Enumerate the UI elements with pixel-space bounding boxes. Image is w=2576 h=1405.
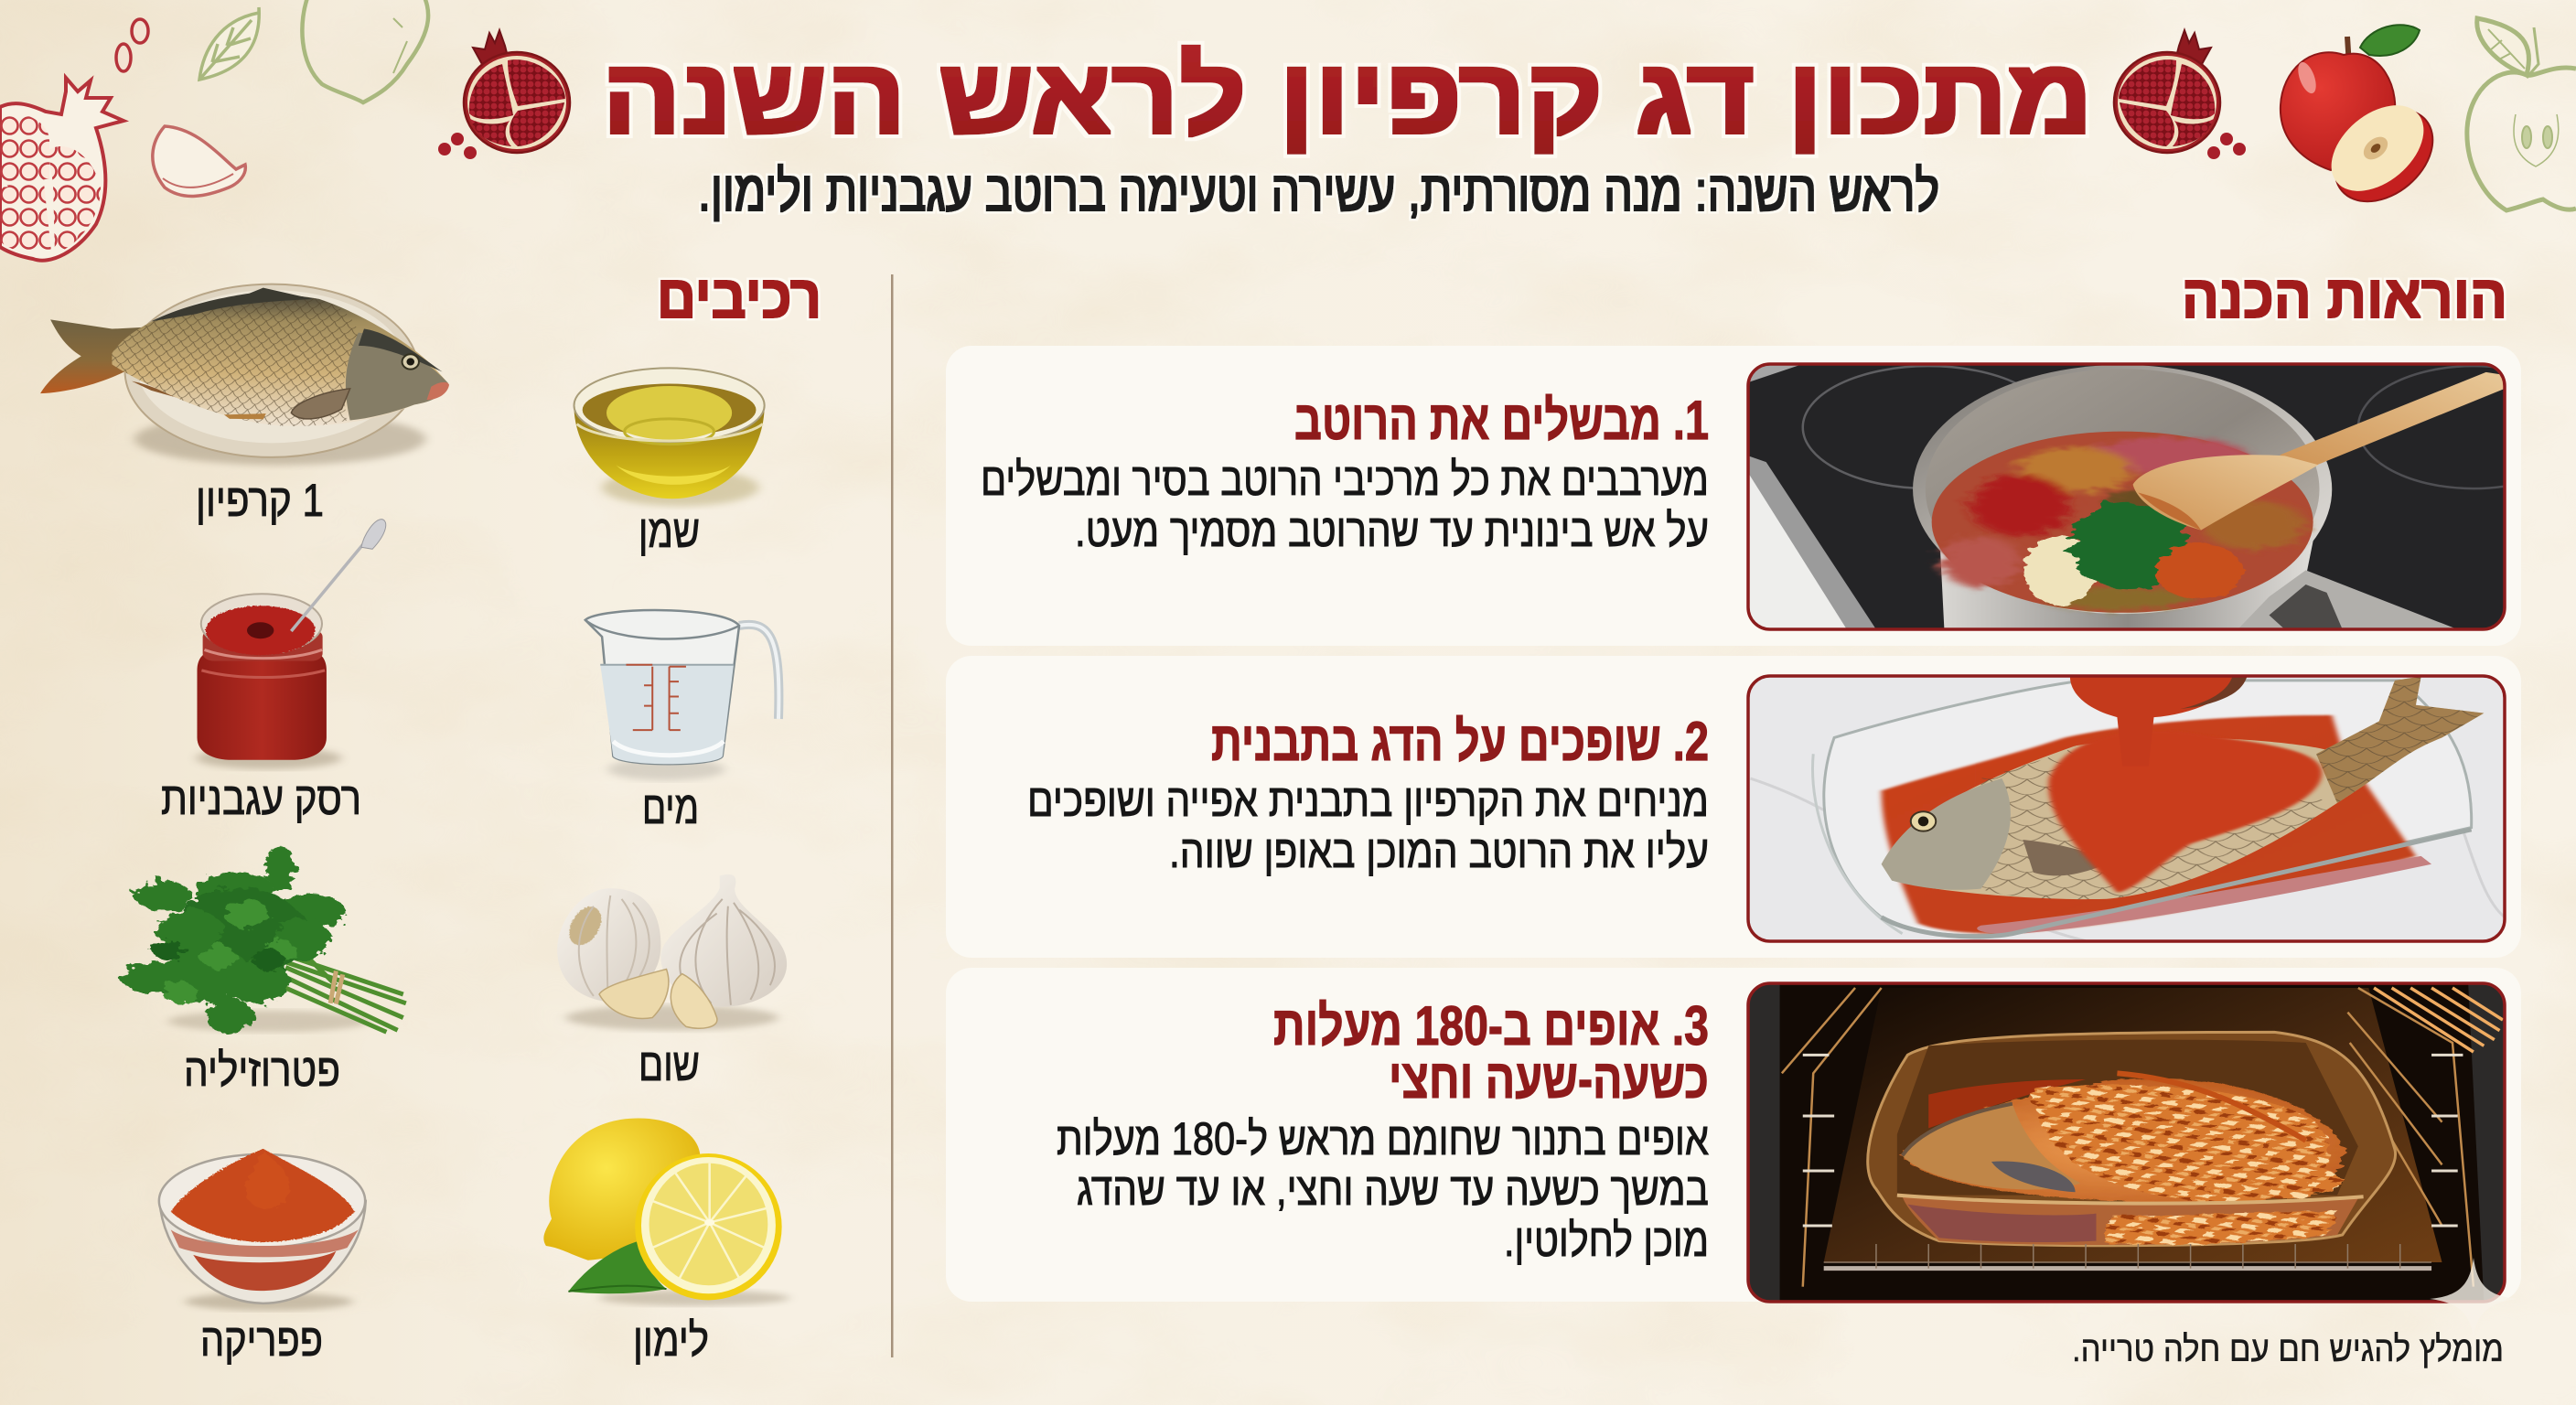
step 3 text: מוכן לחלוטין. xyxy=(1504,1215,1709,1266)
step 2 photo: sauce poured on fish xyxy=(1748,676,2505,941)
step 3 text: אופים בתנור שחומם מראש ל-180 מעלות xyxy=(1057,1113,1709,1164)
step 1 text: על אש בינונית עד שהרוטב מסמיך מעט. xyxy=(1075,505,1709,556)
panel: step 3 xyxy=(946,968,2521,1302)
step 3 text xyxy=(1057,1113,1709,1266)
step 2 text xyxy=(1027,775,1709,877)
ingredient: parsley bunch xyxy=(122,846,406,1034)
decoration: outline leaf xyxy=(199,7,259,80)
label: lemon: לימון xyxy=(633,1314,709,1366)
label: oil: שמן xyxy=(639,506,700,557)
decoration: seeds xyxy=(116,19,148,71)
ingredient: paprika bowl xyxy=(159,1149,366,1311)
step 2 text: מניחים את הקרפיון בתבנית אפייה ושופכים xyxy=(1027,775,1709,826)
decoration: outline pomegranate xyxy=(0,78,123,261)
label: paprika: פפריקה xyxy=(200,1314,323,1366)
decoration: outline apple xyxy=(2467,18,2576,210)
step 1 heading: 1. מבשלים את הרוטב xyxy=(1294,390,1709,451)
step 1 text xyxy=(981,454,1709,556)
ingredient: tomato paste jar xyxy=(196,520,386,769)
step 1 photo: pot on stove xyxy=(1748,364,2576,629)
step 3 text: במשך כשעה עד שעה וחצי, או עד שהדג xyxy=(1077,1164,1709,1215)
ingredient: garlic xyxy=(557,874,787,1030)
note: serving suggestion: מומלץ להגיש חם עם חלה טרייה. xyxy=(2072,1330,2504,1369)
subtitle: לראש השנה: מנה מסורתית, עשירה וטעימה ברוטב עגבניות ולימון. xyxy=(698,160,1939,223)
ingredient: lemon xyxy=(543,1119,789,1306)
step 3 heading xyxy=(1273,995,1709,1110)
panel: ingredients xyxy=(40,284,789,1366)
label: tomato paste: רסק עגבניות xyxy=(161,773,361,824)
decoration: outline garlic clove xyxy=(153,126,245,196)
heading: preparation instructions: הוראות הכנה xyxy=(2182,263,2507,330)
label: 1 carp: 1 קרפיון xyxy=(196,475,324,526)
ingredient: oil bowl xyxy=(574,368,765,506)
step 1 text: מערבבים את כל מרכיבי הרוטב בסיר ומבשלים xyxy=(981,454,1709,505)
heading: ingredients: רכיבים xyxy=(657,263,821,330)
step 2 text: עליו את הרוטב המוכן באופן שווה. xyxy=(1169,826,1709,877)
step 2 heading: 2. שופכים על הדג בתבנית xyxy=(1211,711,1709,772)
decoration: outline lemon xyxy=(302,0,428,102)
panel: step 1 xyxy=(946,346,2576,646)
label: parsley: פטרוזיליה xyxy=(184,1045,340,1096)
panel: step 2 xyxy=(946,656,2521,958)
label: water: מים xyxy=(642,782,699,833)
step 3 heading: כשעה-שעה וחצי xyxy=(1389,1048,1709,1110)
step 3 photo: fish in oven xyxy=(1748,983,2505,1302)
label: garlic: שום xyxy=(639,1039,700,1090)
step 3 heading: 3. אופים ב-180 מעלות xyxy=(1273,995,1709,1056)
ingredient: measuring cup with water xyxy=(585,610,778,780)
title: מתכון דג קרפיון לראש השנה xyxy=(602,37,2093,156)
icon: pomegranate left of title xyxy=(438,30,570,159)
icon: red apple xyxy=(2281,25,2451,220)
icon: pomegranate right of title xyxy=(2114,30,2246,159)
ingredient: carp on plate xyxy=(40,284,449,465)
